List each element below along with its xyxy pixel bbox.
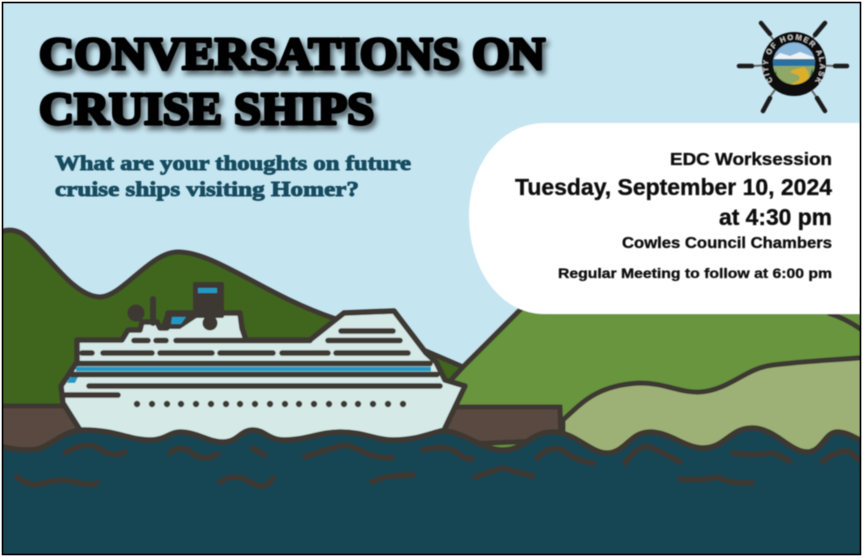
ship wheel handles (739, 23, 847, 111)
subtitle line 2: cruise ships visiting Homer? (55, 177, 359, 201)
portholes (134, 401, 406, 407)
hill ridge line (828, 313, 862, 330)
dark green mountain (0, 230, 470, 410)
meeting details (515, 149, 832, 281)
subtitle (55, 151, 411, 201)
session name: EDC Worksession (670, 149, 832, 169)
logo scene (772, 41, 816, 87)
regular meeting note: Regular Meeting to follow at 6:00 pm (558, 265, 832, 281)
radar dome (128, 304, 144, 322)
info panel background (469, 123, 860, 314)
light green hill (440, 300, 863, 480)
bridge window (171, 317, 186, 324)
cruise ship (61, 282, 465, 442)
ship funnel (193, 282, 224, 330)
mast (150, 299, 156, 323)
title line 1: CONVERSATIONS ON (39, 28, 545, 79)
pale green foreground hill (562, 354, 860, 451)
ship hull and superstructure (61, 311, 465, 442)
water ripples (17, 445, 862, 486)
blue stripe (76, 367, 431, 371)
date: Tuesday, September 10, 2024 (515, 174, 832, 200)
title line 2: CRUISE SHIPS (39, 83, 374, 134)
city logo (736, 20, 850, 114)
water (0, 428, 863, 558)
right shore (445, 407, 561, 445)
bridge block (161, 314, 197, 330)
left shore (3, 403, 76, 448)
time: at 4:30 pm (719, 204, 832, 230)
logo ring (762, 32, 826, 96)
deck lines (63, 331, 440, 395)
title (39, 28, 545, 134)
subtitle line 1: What are your thoughts on future (55, 151, 411, 175)
location: Cowles Council Chambers (622, 235, 832, 252)
bow window (67, 377, 78, 383)
